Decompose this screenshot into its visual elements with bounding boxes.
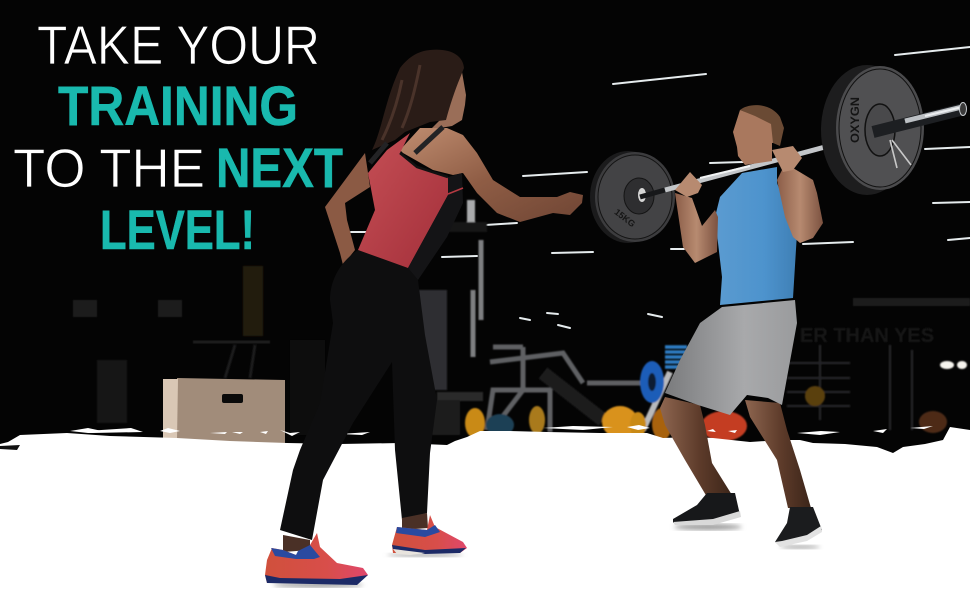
wooden plyo box — [163, 378, 285, 444]
ceiling lights — [351, 47, 970, 328]
man lifter — [660, 105, 823, 549]
man right leg — [745, 400, 811, 508]
woman bent arm — [325, 153, 370, 265]
woman ankles — [283, 513, 428, 552]
man shorts — [665, 300, 797, 415]
man head — [733, 110, 780, 165]
gym equipment right: ER THAN YES — [800, 325, 934, 347]
headline word: next: NEXT — [216, 136, 343, 199]
barbell left side — [590, 147, 825, 243]
man left leg — [660, 397, 732, 497]
small plate — [590, 151, 675, 243]
large plate and outer bar — [821, 65, 966, 195]
woman hair — [372, 50, 464, 150]
woman shoes — [265, 515, 467, 588]
headline line: to the: TO THE — [13, 137, 205, 199]
woman top — [358, 127, 463, 280]
large plate: OXYGN — [848, 97, 862, 143]
torn white paper edge — [0, 425, 970, 600]
headline line: level: LEVEL! — [100, 198, 255, 261]
gym equipment right — [787, 298, 970, 433]
man tank top — [715, 167, 797, 305]
headline line: training: TRAINING — [58, 74, 298, 137]
woman leggings — [280, 250, 437, 540]
man right arm — [777, 168, 823, 243]
woman face — [432, 72, 466, 128]
woman trainer — [265, 50, 583, 588]
dark gym background — [0, 0, 970, 456]
gym equipment centre — [413, 200, 747, 441]
man hair — [740, 105, 784, 146]
headline line: take your: TAKE YOUR — [37, 14, 320, 76]
gym equipment left — [73, 266, 325, 435]
man hands on bar — [675, 146, 802, 197]
man shoes — [673, 493, 822, 549]
large plate — [821, 65, 924, 195]
woman extended arm and shoulders — [400, 128, 583, 222]
outer bar — [873, 102, 966, 132]
man left arm — [675, 193, 718, 263]
headline — [13, 14, 343, 261]
small plate: 15KG — [612, 207, 637, 229]
inner bar — [640, 147, 825, 197]
